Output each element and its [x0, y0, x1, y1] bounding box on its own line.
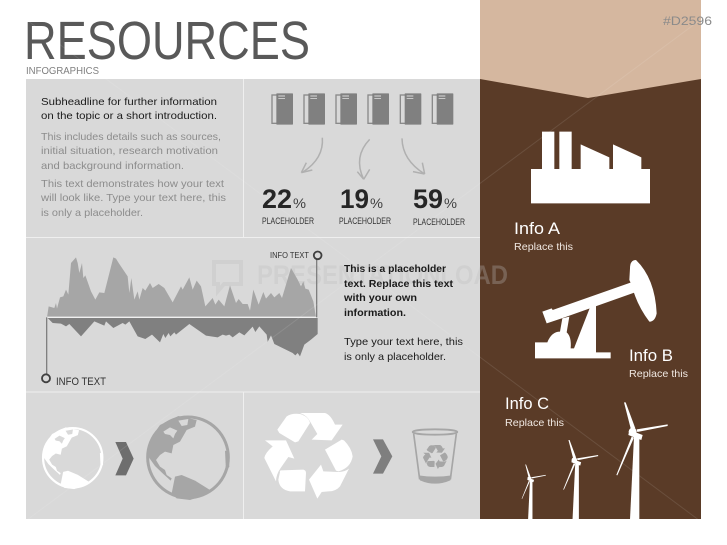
stat: 19 percent: 19 [340, 184, 369, 214]
arrow: chevron globes [115, 442, 134, 475]
label: info B: Info B [629, 346, 673, 365]
stat: 59 percent: PLACEHOLDER [413, 217, 465, 227]
icon: large turbine [616, 402, 668, 519]
stat: 19 percent: % [370, 195, 383, 211]
icon: small turbine [522, 465, 546, 520]
panel: grey background [26, 79, 480, 519]
arrows: books to percentages [301, 138, 425, 179]
arrow: chevron recycle [373, 439, 392, 474]
text block: introduction: This includes details such as sources, [41, 131, 221, 143]
marker: right info text [314, 251, 321, 317]
marker: left info text [42, 317, 50, 382]
stat: 59 percent: 59 [413, 184, 443, 214]
text block: placeholder: is only a placeholder. [344, 351, 446, 363]
label: info B: Replace this [629, 368, 688, 380]
text block: placeholder: This is a placeholder [344, 263, 446, 275]
area chart [42, 251, 321, 382]
icon: recycle symbol [264, 413, 353, 499]
label: info C: Replace this [505, 417, 564, 429]
icon: grey globe [148, 416, 229, 500]
text block: placeholder: Type your text here, this [344, 336, 463, 348]
stat: 59 percent: % [444, 195, 457, 211]
text block: introduction: is only a placeholder. [41, 207, 143, 219]
text block: introduction: and background information. [41, 160, 184, 172]
icon: wind turbines [522, 402, 668, 520]
icon: white globe [43, 427, 103, 489]
stat: 19 percent: PLACEHOLDER [339, 216, 391, 226]
watermark: PRESENTATIONLOAD [257, 260, 508, 290]
text block: introduction: Subheadline for further information [41, 96, 217, 108]
label: bottom info text: INFO TEXT [56, 376, 106, 388]
stat: 59 percent [413, 184, 465, 227]
label: top info text: INFO TEXT [270, 250, 309, 260]
panel: brown column [480, 0, 701, 519]
label: info B [629, 346, 688, 380]
stat: 19 percent [339, 184, 391, 226]
stat: 22 percent: PLACEHOLDER [262, 216, 314, 226]
stat: 22 percent: % [293, 195, 306, 211]
text block: introduction: will look like. Type your text here, this [40, 192, 226, 204]
subtitle: INFOGRAPHICS [26, 65, 99, 77]
label: info C [505, 394, 564, 429]
stat: 22 percent: 22 [262, 184, 292, 214]
text block: introduction: on the topic or a short introduction. [41, 110, 217, 122]
label: info A: Replace this [514, 241, 573, 253]
label: info A: Info A [514, 219, 561, 238]
code label: #D2596 [663, 14, 712, 28]
text block: introduction [40, 96, 226, 219]
icon: oil pump [535, 260, 657, 358]
icon row: six books [272, 93, 453, 125]
icon: recycling bin [413, 429, 457, 484]
text block: placeholder: with your own [343, 292, 417, 304]
text block: placeholder: text. Replace this text [344, 278, 454, 290]
stat: 22 percent [262, 184, 314, 226]
icon: factory [531, 132, 650, 203]
text block: placeholder [343, 263, 463, 363]
title: RESOURCES [24, 11, 310, 71]
text block: placeholder: information. [344, 307, 406, 319]
text block: introduction: initial situation, research motivation [41, 145, 218, 157]
text block: introduction: This text demonstrates how your text [41, 178, 224, 190]
label: info A [514, 219, 573, 253]
icon: medium turbine [563, 440, 598, 520]
label: info C: Info C [505, 394, 549, 413]
